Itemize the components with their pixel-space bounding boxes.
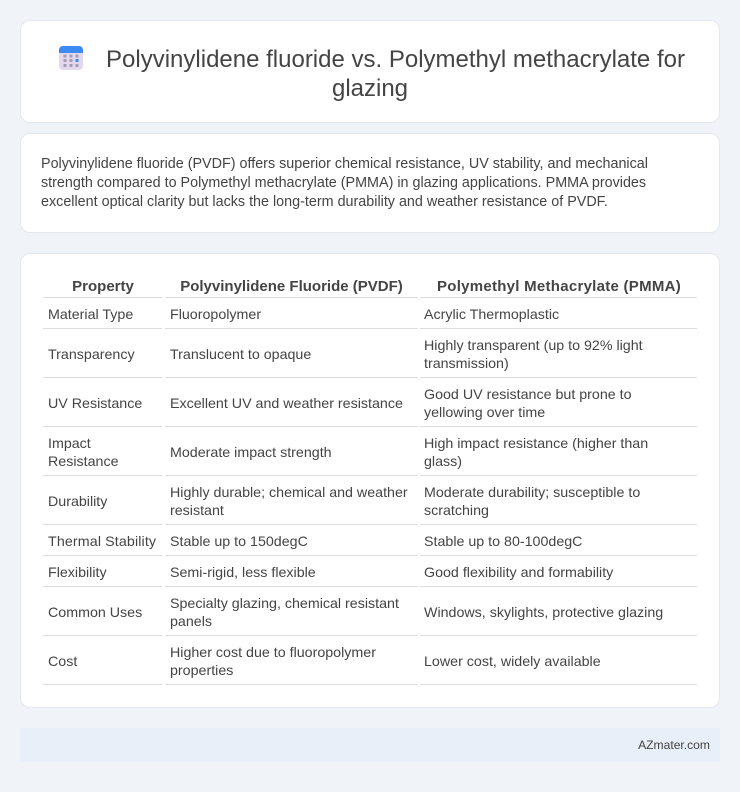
panel: comparison table: Highly transparent (up to 92% light [424,338,643,354]
panel: comparison table: Lower cost, widely available [424,654,601,670]
heading: Polyvinylidene fluoride vs. Polymethyl methacrylate for [106,46,685,73]
summary text: strength compared to Polymethyl methacrylate (PMMA) in glazing applications. PMMA provides [41,175,646,191]
icon: calendar [59,46,83,70]
panel: comparison table: panels [170,614,212,630]
row: transparency: Transparency [48,347,135,363]
panel: comparison table: Polymethyl Methacrylate (PMMA) [437,278,681,295]
panel: comparison table: Acrylic Thermoplastic [424,307,559,323]
table header: Property [72,278,134,295]
panel: comparison table [20,253,720,708]
summary text [41,156,648,210]
summary text: Polyvinylidene fluoride (PVDF) offers superior chemical resistance, UV stability, and mechanical [41,156,648,172]
heading [106,46,685,102]
panel: title [20,20,720,123]
row: thermal stability: Thermal Stability [48,534,156,550]
row: UV resistance: UV Resistance [48,396,142,412]
panel: comparison table: Translucent to opaque [170,347,311,363]
heading: glazing [332,75,408,102]
row: durability: Durability [48,494,107,510]
panel: comparison table: yellowing over time [424,405,545,421]
panel: comparison table: Moderate durability; susceptible to [424,485,640,501]
panel: comparison table: Polyvinylidene Fluoride (PVDF) [180,278,403,295]
panel: comparison table: Stable up to 80-100degC [424,534,582,550]
panel: comparison table: Specialty glazing, chemical resistant [170,596,399,612]
panel: comparison table: Highly durable; chemical and weather [170,485,408,501]
panel: comparison table: scratching [424,503,489,519]
row: impact resistance: Impact [48,436,91,452]
panel: comparison table: High impact resistance (higher than [424,436,648,452]
panel: comparison table: Excellent UV and weather resistance [170,396,403,412]
panel: comparison table: Fluoropolymer [170,307,261,323]
row: impact resistance: Resistance [48,454,118,470]
panel: comparison table: Moderate impact strength [170,445,332,461]
panel: comparison table: transmission) [424,356,509,372]
row: cost: Cost [48,654,77,670]
panel: summary [20,133,720,233]
panel: comparison table: Higher cost due to fluoropolymer [170,645,376,661]
panel: comparison table: Good flexibility and formability [424,565,613,581]
panel: comparison table: resistant [170,503,224,519]
panel: comparison table: Good UV resistance but prone to [424,387,632,403]
panel: comparison table: Windows, skylights, protective glazing [424,605,663,621]
footer credit: AZmater.com [638,738,710,752]
panel: comparison table: glass) [424,454,462,470]
panel: comparison table: Stable up to 150degC [170,534,308,550]
row: impact resistance [48,436,118,470]
panel: comparison table: properties [170,663,233,679]
panel: comparison table: Semi-rigid, less flexible [170,565,316,581]
row: common uses: Common Uses [48,605,142,621]
row: flexibility: Flexibility [48,565,107,581]
summary text: excellent optical clarity but lacks the long-term durability and weather resistance of PVDF. [41,194,608,210]
row: material type: Material Type [48,307,133,323]
footer bar [20,728,720,762]
